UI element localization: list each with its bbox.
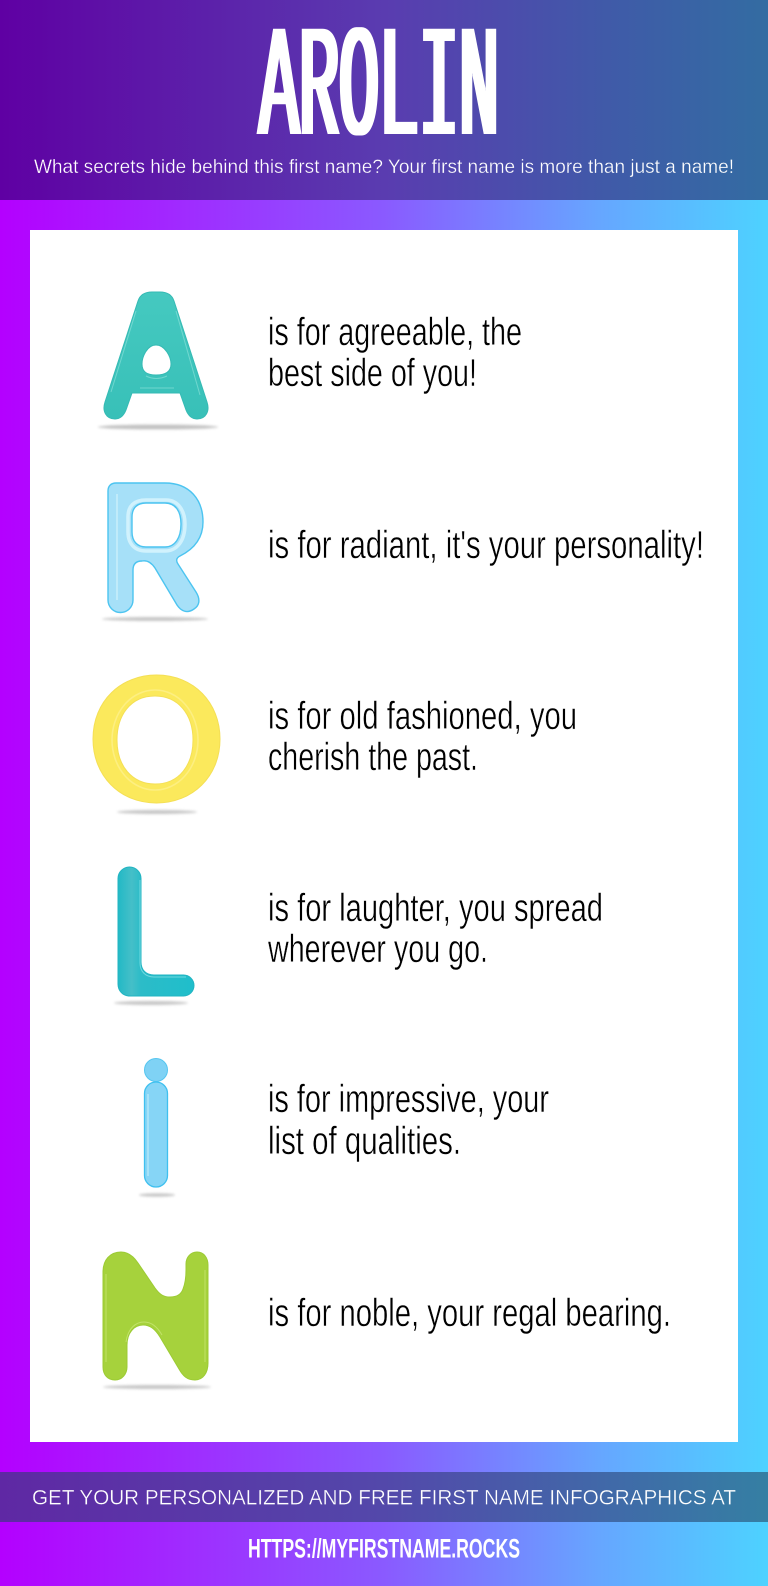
icon: letter A [104,292,208,419]
shadow: i [139,1193,175,1197]
icon: letter O [93,675,220,803]
text: i line: is for impressive, your [268,1078,549,1121]
text: i line: list of qualities. [268,1120,461,1163]
row: letter L [114,867,603,1005]
icon: letter i [144,1058,168,1187]
text: L line: is for laughter, you spread [268,887,603,930]
shadow: R [102,617,208,621]
text: O line: cherish the past. [268,736,478,779]
text: A line: best side of you! [268,352,477,395]
title: AROLIN [259,1,499,182]
icon: letter L [118,867,194,996]
shadow: L [114,1001,188,1005]
shadow: N [103,1385,211,1389]
footer url: HTTPS://MYFIRSTNAME.ROCKS [248,1534,520,1564]
footer band [0,1472,768,1522]
shadow: A [98,425,218,429]
text: A line: is for agreeable, the [268,311,522,354]
row: letter N [103,1252,671,1389]
text: O line: is for old fashioned, you [268,695,577,738]
footer call to action: GET YOUR PERSONALIZED AND FREE FIRST NAME INFOGRAPHICS AT [32,1486,736,1510]
row: letter R [102,483,704,621]
panel: white content card [30,230,738,1442]
icon: letter N [103,1252,208,1380]
row: letter i [139,1058,549,1197]
row: letter O [93,675,577,814]
header band [0,0,768,200]
shadow: O [117,810,197,814]
icon: letter R [108,483,203,612]
row: letter A [98,292,522,429]
text: L line: wherever you go. [267,928,488,971]
subtitle: What secrets hide behind this first name? Your first name is more than just a name! [34,156,734,178]
